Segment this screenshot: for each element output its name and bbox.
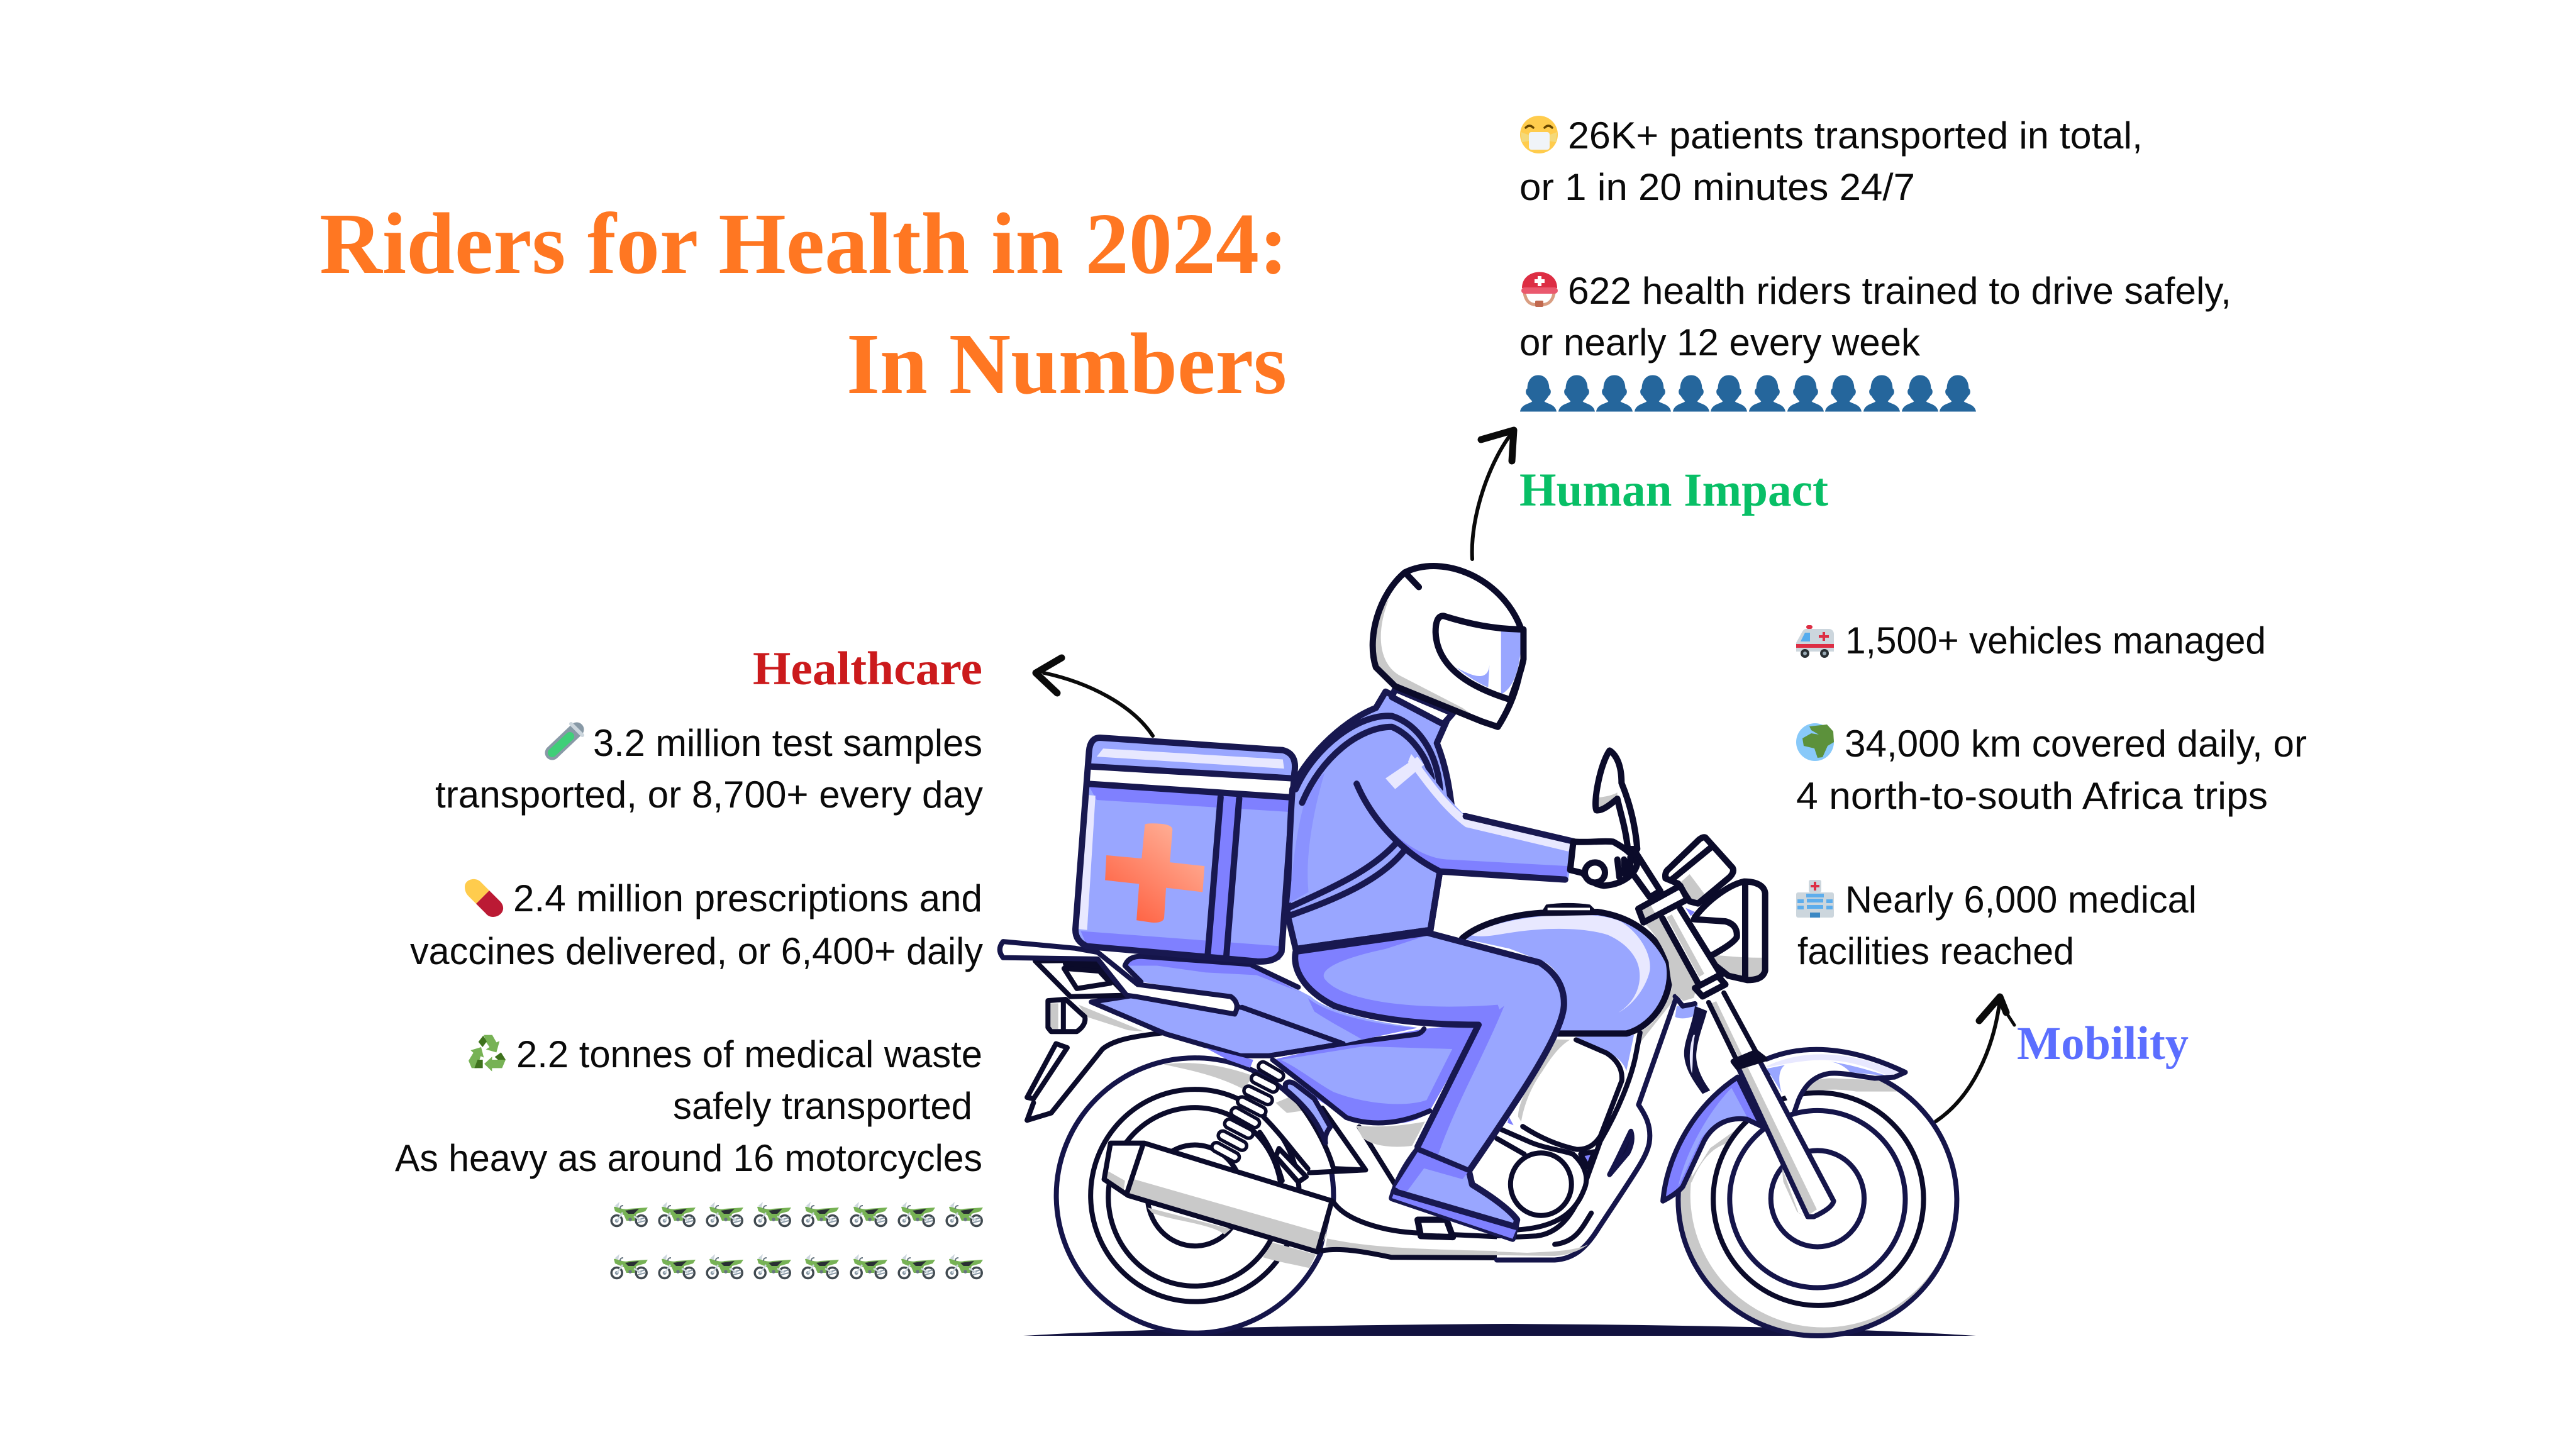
text: km covered — [1796, 723, 2307, 817]
panel: mobility — [1796, 619, 2307, 1070]
icon: recycling — [469, 1035, 506, 1072]
icon: hospital — [1796, 880, 1834, 918]
text: medical waste: 2.2 tonnes of medical waste — [516, 1033, 982, 1075]
fuel tank — [1462, 903, 1670, 1033]
underbelly — [1323, 1202, 1507, 1258]
arrow: to human impact — [1472, 430, 1514, 559]
text: km covered: 4 north-to-south Africa trips — [1796, 775, 2268, 817]
fork upper stem — [1633, 853, 1660, 897]
text: medical waste: As heavy as around 16 motorcycles — [395, 1137, 982, 1179]
illustration: rider on motorcycle — [1000, 566, 1976, 1336]
rear half of motorcycle — [1027, 999, 1507, 1333]
exhaust — [1104, 1143, 1332, 1252]
front half of motorcycle — [1497, 975, 1957, 1336]
boot and footpeg — [1392, 1150, 1517, 1239]
text: test samples: transported, or 8,700+ every day — [435, 774, 983, 816]
heading: human impact: Human Impact — [1519, 464, 1828, 516]
icon: rescue worker helmet — [1521, 272, 1558, 307]
upper fork tube — [1662, 908, 1721, 987]
arrow: to healthcare — [1036, 658, 1153, 736]
delivery box — [1075, 738, 1295, 962]
text: facilities: Nearly 6,000 medical — [1845, 879, 2197, 921]
text: patients: or 1 in 20 minutes 24/7 — [1519, 166, 1915, 208]
rear fender line and tail strut — [1027, 1005, 1167, 1120]
title: In Numbers — [847, 316, 1287, 413]
text: prescriptions — [410, 877, 983, 972]
rider leg — [1295, 933, 1564, 1171]
text: riders trained: or nearly 12 every week — [1519, 321, 1921, 364]
text: riders trained — [1519, 270, 2231, 364]
grey shadow behind fork — [1646, 916, 1698, 1001]
text: medical waste: safely transported — [673, 1085, 972, 1127]
icon row: twelve people — [1520, 375, 1976, 411]
brake cable — [1684, 1006, 1710, 1094]
heading: healthcare: Healthcare — [753, 643, 982, 695]
text: km covered: 34,000 km covered daily, or — [1845, 723, 2307, 765]
text: vehicles: 1,500+ vehicles managed — [1845, 619, 2266, 662]
swingarm and chain guard — [1260, 1089, 1425, 1189]
backpack shoulder straps — [1296, 716, 1440, 789]
icon: ambulance — [1796, 625, 1834, 658]
text: test samples — [435, 722, 983, 816]
helmet — [1372, 566, 1523, 727]
tail light — [1048, 999, 1085, 1031]
icon: test tube — [552, 724, 582, 753]
rear shock spring — [1216, 1067, 1279, 1157]
ground shadow — [1023, 1324, 1976, 1336]
upper clamp — [1638, 886, 1687, 923]
seat and rear bodywork — [1000, 941, 1480, 1143]
rear rack — [1000, 941, 1237, 1014]
heading: mobility: Mobility — [2017, 1018, 2189, 1070]
text: patients: 26K+ patients transported in total, — [1568, 114, 2143, 157]
title: Riders for Health in 2024: — [319, 196, 1288, 292]
panel: human impact — [1519, 114, 2231, 516]
text: prescriptions: vaccines delivered, or 6,400+ daily — [410, 930, 983, 972]
under-seat panel — [1269, 1023, 1480, 1143]
headlight — [1685, 882, 1765, 980]
text: facilities — [1797, 879, 2197, 972]
text: medical waste — [395, 1033, 982, 1179]
seat — [1125, 957, 1417, 1043]
arrow: to mobility — [1936, 997, 2014, 1121]
motorcycle front details: mirror, hand, fork, headlight — [1570, 750, 1765, 1001]
panel: healthcare — [395, 643, 983, 1278]
front fork lower tube — [1709, 993, 1834, 1217]
icon rows: sixteen motorcycles — [611, 1202, 983, 1278]
text: riders trained: 622 health riders trained to drive safely, — [1568, 270, 2231, 312]
text: test samples: 3.2 million test samples — [593, 722, 982, 764]
speedometer — [1665, 837, 1733, 904]
title — [319, 196, 1288, 413]
icon: pill — [465, 879, 503, 917]
mirror — [1596, 750, 1637, 849]
text: prescriptions: 2.4 million prescriptions and — [513, 877, 982, 919]
frame — [1497, 975, 1698, 1260]
rider and delivery box — [1075, 566, 1575, 1239]
front wheel — [1678, 1063, 1957, 1336]
rider upper arm — [1357, 752, 1575, 880]
text: patients — [1519, 114, 2143, 208]
engine — [1497, 1033, 1640, 1237]
gloved hand — [1570, 841, 1637, 886]
rear wheel — [1057, 1058, 1333, 1333]
front fender — [1663, 1050, 1905, 1201]
icon: globe showing Africa — [1796, 723, 1834, 761]
icon: face with medical mask — [1520, 116, 1558, 153]
lower fork clamp — [1695, 976, 1726, 996]
lower cowl — [1091, 996, 1343, 1056]
text: facilities: facilities reached — [1797, 930, 2074, 972]
icon: red cross — [1105, 823, 1204, 923]
rider lower jacket and torso — [1287, 692, 1466, 949]
